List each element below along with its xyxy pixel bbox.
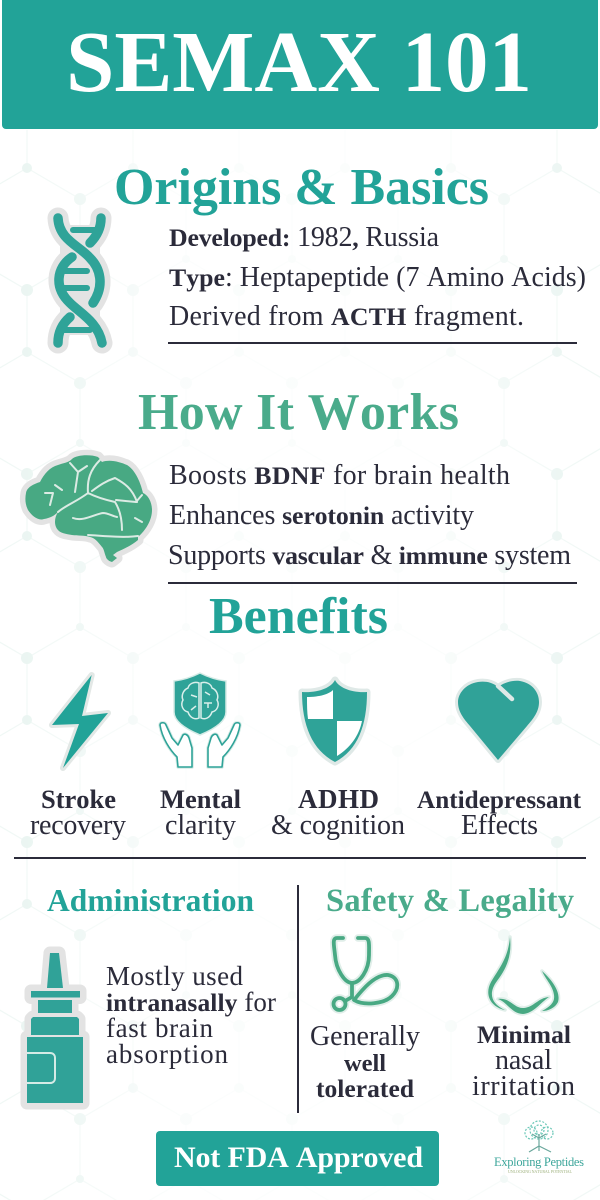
benefit label: stroke recovery	[30, 784, 126, 841]
heading: how it works: How It Works	[138, 384, 459, 441]
benefit label: ADHD and cognition	[271, 784, 405, 841]
benefit label: antidepressant effects	[417, 787, 582, 841]
benefit label: mental clarity	[160, 784, 241, 841]
benefit label: ADHD and cognition: ADHD	[298, 784, 379, 814]
text block: administration: absorption	[106, 1039, 228, 1069]
text block: administration: intranasally for	[106, 987, 276, 1017]
icon: DNA helix	[58, 218, 102, 343]
benefit label: mental clarity: Mental	[160, 784, 241, 814]
safety label: generally well tolerated: well	[344, 1050, 386, 1077]
logo: exploring peptides: UNLOCKING NATURAL POTENTIAL	[508, 1169, 573, 1174]
benefit label: stroke recovery: Stroke	[41, 784, 116, 814]
text block: how it works facts: Enhances serotonin activity	[169, 500, 474, 531]
icon: nose	[488, 937, 559, 1014]
icon: stethoscope	[334, 938, 397, 1010]
safety label: generally well tolerated: Generally	[310, 1021, 420, 1052]
text block: how it works facts	[168, 460, 571, 571]
heading: administration: Administration	[47, 883, 254, 918]
heading: benefits: Benefits	[209, 588, 388, 645]
safety label: minimal nasal irritation	[472, 1020, 575, 1102]
safety label: generally well tolerated	[310, 1021, 420, 1103]
icon: lightning bolt	[52, 675, 108, 768]
icon: quartered shield	[302, 680, 367, 762]
heading: origins and basics: Origins & Basics	[114, 159, 489, 216]
benefit label: antidepressant effects: Effects	[461, 810, 538, 841]
safety label: minimal nasal irritation: nasal	[495, 1045, 552, 1076]
logo: exploring peptides	[494, 1121, 584, 1174]
benefit label: mental clarity: clarity	[165, 810, 236, 841]
text block: administration: fast brain	[106, 1013, 214, 1043]
icon: heart	[458, 681, 539, 760]
icon: brain	[25, 455, 152, 562]
benefit label: stroke recovery: recovery	[30, 810, 126, 841]
callout: not FDA approved: Not FDA Approved	[174, 1141, 423, 1174]
text block: how it works facts: Boosts BDNF for brain health	[169, 460, 510, 491]
safety label: minimal nasal irritation: irritation	[472, 1071, 575, 1102]
title banner	[2, 0, 598, 129]
safety label: generally well tolerated: tolerated	[316, 1074, 414, 1103]
icon: shield brain in hands	[160, 673, 240, 767]
heading: safety and legality: Safety & Legality	[326, 883, 574, 919]
text block: how it works facts: Supports vascular & immune system	[168, 540, 571, 571]
title banner: SEMAX 101	[66, 13, 532, 110]
benefit label: ADHD and cognition: & cognition	[271, 810, 405, 841]
logo: exploring peptides: Exploring Peptides	[494, 1155, 584, 1169]
text block: origins facts: Developed: 1982, Russia	[169, 222, 440, 253]
safety label: minimal nasal irritation: Minimal	[477, 1020, 571, 1049]
callout: not FDA approved	[156, 1131, 439, 1186]
text block: origins facts	[169, 222, 586, 332]
benefit label: antidepressant effects: Antidepressant	[417, 787, 582, 814]
icon: nasal spray bottle	[27, 953, 83, 1103]
text block: administration: Mostly used	[106, 961, 244, 991]
text block: administration	[106, 961, 276, 1069]
text block: origins facts: Derived from ACTH fragment.	[169, 301, 524, 332]
text block: origins facts: Type: Heptapeptide (7 Amino Acids)	[169, 262, 586, 293]
